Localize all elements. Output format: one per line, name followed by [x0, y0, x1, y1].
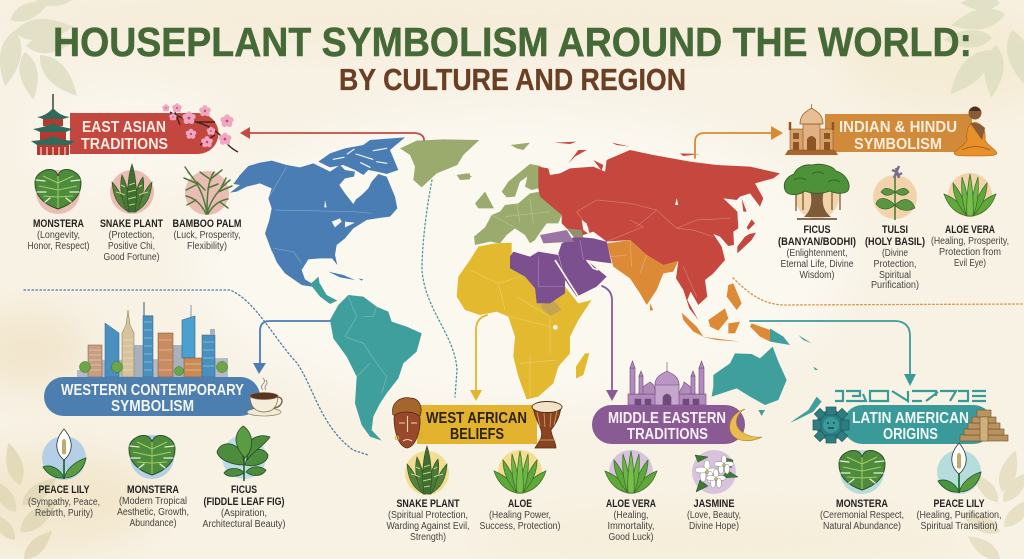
- label: banyan: [778, 224, 856, 281]
- arrow: Asia to Indian: [695, 126, 783, 158]
- subtitle: BY CULTURE AND REGION: [339, 63, 686, 97]
- label: banyan: (BANYAN/BODHI): [778, 236, 856, 248]
- banner: [592, 405, 745, 444]
- North America: [230, 137, 405, 287]
- label: monstera: Aesthetic, Growth,: [117, 507, 189, 518]
- world map: Eurasia, Africa, Oceania: [457, 142, 822, 423]
- label: tulsi: Purification): [871, 280, 919, 291]
- label: fiddle leaf fig: FICUS: [231, 484, 257, 496]
- panel: East Asian traditions: [28, 94, 242, 263]
- label: bamboo palm: [172, 218, 242, 252]
- label: snake plant: Positive Chi,: [108, 241, 155, 252]
- banner: [44, 377, 260, 416]
- dotted route lines: [24, 180, 1024, 455]
- plant: monstera: [129, 435, 175, 479]
- plant: monstera: [839, 450, 885, 494]
- icon: pagoda: [31, 94, 75, 155]
- arrow: Greenland to East Asian: [240, 127, 424, 140]
- plant: monstera: [35, 170, 81, 214]
- label: peace lily: (Sympathy, Peace,: [28, 497, 100, 508]
- banner text: [81, 119, 168, 153]
- banner text: LATIN AMERICAN: [852, 410, 969, 427]
- plant: peace lily: [42, 429, 86, 480]
- label: jasmine: JASMINE: [694, 498, 734, 510]
- panel: Middle Eastern traditions: [592, 361, 762, 543]
- label: monstera: MONSTERA: [127, 484, 179, 496]
- banner text: TRADITIONS: [81, 136, 168, 153]
- panel: Latin American origins: [813, 391, 1008, 532]
- Greenland, Iceland, Svalbard: [400, 139, 530, 187]
- plant: bamboo palm: [184, 167, 232, 215]
- label: peace lily: PEACE LILY: [934, 498, 985, 510]
- banner: [417, 405, 537, 444]
- label: aloe vera: ALOE VERA: [606, 498, 656, 510]
- banner text: WEST AFRICAN: [426, 410, 527, 427]
- plant: snake plant: [405, 446, 449, 495]
- icon: cherry blossom branch: [162, 103, 238, 152]
- label: aloe: ALOE: [508, 498, 532, 510]
- icon: mosque: [628, 361, 706, 405]
- plant: aloe: [494, 450, 546, 494]
- label: tulsi: TULSI: [882, 224, 908, 236]
- label: banyan: Eternal Life, Divine: [780, 259, 854, 270]
- label: snake plant: Warding Against Evil,: [386, 521, 470, 532]
- plant: peace lily: [937, 443, 981, 494]
- label: monstera: (Longevity,: [37, 230, 80, 241]
- label: fiddle leaf fig: [202, 484, 286, 530]
- label: aloe vera: (Healing, Prosperity,: [931, 236, 1009, 247]
- banner: [70, 113, 218, 154]
- Africa: [457, 243, 592, 399]
- banner text: SYMBOLISM: [111, 398, 194, 415]
- banner: [825, 114, 972, 152]
- label: snake plant: Strength): [410, 532, 446, 543]
- label: banyan: FICUS: [804, 224, 830, 236]
- banner: [843, 405, 993, 444]
- label: snake plant: SNAKE PLANT: [100, 218, 163, 230]
- label: peace lily: [28, 484, 100, 519]
- label: peace lily: PEACE LILY: [38, 484, 90, 496]
- label: peace lily: [916, 498, 1002, 532]
- banner text: WESTERN CONTEMPORARY: [61, 382, 244, 399]
- icon: Buddha: [954, 106, 997, 156]
- world map: Americas and Greenland: [230, 137, 530, 441]
- label: banyan: (Enlightenment,: [786, 248, 848, 259]
- banner text: [61, 382, 244, 415]
- icon: Aztec sun stone: [813, 407, 849, 443]
- label: monstera: [28, 218, 90, 252]
- label: tulsi: Protection,: [874, 259, 916, 270]
- label: monstera: (Modern Tropical: [119, 496, 187, 507]
- plant: banyan tree: [784, 164, 849, 219]
- icon: stepped pyramid: [960, 410, 1008, 441]
- icon: djembe drum: [532, 402, 562, 448]
- label: jasmine: Divine Hope): [689, 521, 739, 532]
- Central America: [310, 277, 337, 304]
- label: aloe vera: Good Luck): [608, 532, 654, 543]
- label: aloe: (Healing Power,: [489, 510, 551, 521]
- banner text: TRADITIONS: [627, 426, 708, 443]
- label: bamboo palm: BAMBOO PALM: [172, 218, 242, 230]
- panel: Western contemporary symbolism: [28, 302, 286, 530]
- banner text: [852, 410, 969, 443]
- label: snake plant: [100, 218, 163, 263]
- banner text: EAST ASIAN: [82, 119, 166, 136]
- arrow: Oceania to Latin American: [750, 321, 916, 386]
- decorative leaves: bottom right: [957, 448, 1024, 559]
- label: snake plant: [386, 498, 470, 543]
- plant: jasmine: [692, 450, 738, 494]
- label: aloe vera: Immortality,: [608, 521, 654, 532]
- label: snake plant: SNAKE PLANT: [396, 498, 460, 510]
- banner text: INDIAN & HINDU: [839, 119, 957, 136]
- Europe: [457, 164, 562, 245]
- label: peace lily: Rebirth, Purity): [35, 508, 93, 519]
- label: bamboo palm: Flexibility): [187, 241, 227, 252]
- title: HOUSEPLANT SYMBOLISM AROUND THE WORLD:: [53, 19, 972, 65]
- decorative leaves: bottom left: [0, 440, 63, 559]
- label: monstera: [117, 484, 189, 529]
- label: aloe vera: ALOE VERA: [945, 224, 995, 236]
- label: tulsi: Spiritual: [879, 270, 911, 281]
- arrow: South America to Western: [253, 321, 330, 374]
- label: tulsi: [865, 224, 925, 291]
- Russia and East Asia: [538, 142, 780, 320]
- banner text: ORIGINS: [883, 426, 938, 443]
- label: monstera: (Ceremonial Respect,: [820, 510, 904, 521]
- label: jasmine: [687, 498, 741, 532]
- label: aloe vera: Protection from: [939, 247, 1001, 258]
- label: monstera: Natural Abundance): [823, 521, 901, 532]
- banner text: [426, 410, 527, 443]
- icon: ornament band: [835, 391, 986, 401]
- arrow: Arabia to Middle Eastern: [602, 286, 618, 401]
- icon: city skyline: [77, 302, 228, 377]
- label: monstera: Abundance): [130, 518, 176, 529]
- label: tulsi: (Divine: [882, 248, 908, 259]
- label: aloe vera: Evil Eye): [954, 258, 986, 269]
- label: jasmine: (Love, Beauty,: [687, 510, 741, 521]
- Oceania: [712, 328, 822, 423]
- South Asia and Indonesia: [607, 240, 770, 342]
- banner text: [839, 119, 957, 153]
- icon: Taj Mahal: [785, 104, 838, 155]
- label: aloe vera: (Healing,: [614, 510, 648, 521]
- decorative leaves: top left: [0, 0, 84, 103]
- label: aloe vera: [606, 498, 656, 543]
- South America: [330, 295, 422, 441]
- label: bamboo palm: (Luck, Prosperity,: [174, 230, 240, 241]
- label: snake plant: (Protection,: [108, 230, 154, 241]
- label: monstera: Honor, Respect): [28, 241, 90, 252]
- label: aloe vera: [931, 224, 1009, 269]
- label: peace lily: (Healing, Purification,: [916, 510, 1002, 521]
- label: fiddle leaf fig: Architectural Beauty): [202, 519, 286, 530]
- panel: West African beliefs: [386, 398, 562, 543]
- label: monstera: [820, 498, 904, 532]
- label: snake plant: Good Fortune): [104, 252, 160, 263]
- plant: tulsi: [873, 166, 917, 220]
- label: aloe: [480, 498, 560, 532]
- icon: coffee cup: [247, 378, 282, 416]
- decorative leaves: top right: [942, 0, 1024, 101]
- plant: aloe vera: [605, 450, 657, 494]
- panel: Indian and Hindu symbolism: [778, 104, 1009, 291]
- label: banyan: Wisdom): [800, 270, 834, 281]
- icon: crescent moon: [730, 409, 762, 441]
- label: snake plant: (Spiritual Protection,: [388, 510, 468, 521]
- label: aloe: Success, Protection): [480, 521, 560, 532]
- label: monstera: MONSTERA: [33, 218, 84, 230]
- label: monstera: MONSTERA: [836, 498, 888, 510]
- banner text: BELIEFS: [450, 426, 504, 443]
- label: fiddle leaf fig: (FIDDLE LEAF FIG): [204, 496, 285, 508]
- plant: fiddle leaf fig: [217, 426, 270, 481]
- label: tulsi: (HOLY BASIL): [865, 236, 925, 248]
- arrow: Africa to West African: [470, 315, 487, 401]
- Middle East: [510, 228, 612, 303]
- banner text: MIDDLE EASTERN: [608, 410, 726, 427]
- banner text: [608, 410, 726, 443]
- plant: snake plant: [110, 164, 154, 214]
- icon: tribal mask: [393, 398, 423, 448]
- label: peace lily: Spiritual Transition): [920, 521, 998, 532]
- plant: aloe vera: [944, 173, 996, 217]
- label: fiddle leaf fig: (Aspiration,: [221, 508, 267, 519]
- banner text: SYMBOLISM: [854, 136, 942, 153]
